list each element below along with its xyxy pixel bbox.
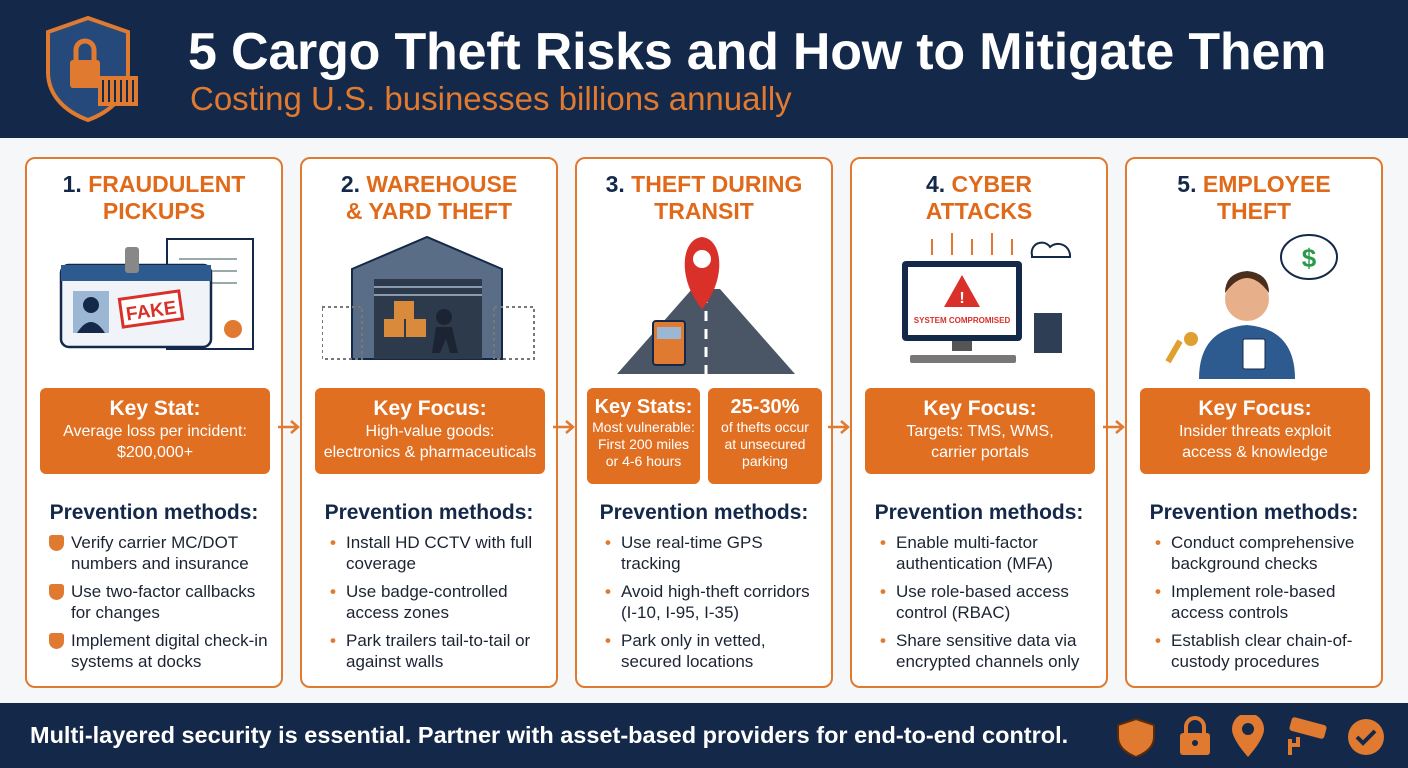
key focus: Insider threats exploit: [1179, 423, 1331, 440]
arrow: [828, 420, 850, 434]
key focus: Key Focus:: [373, 397, 487, 420]
key stats: Key Stats:: [595, 396, 692, 418]
stat 25-30%: of thefts occur: [721, 419, 809, 435]
key stat: Key Stat:: [109, 397, 201, 420]
prevention list: Use badge-controlled access zones: [346, 582, 508, 622]
heading: [926, 171, 1032, 224]
icon: compromised computer: [902, 233, 1072, 363]
prevention heading: Prevention methods:: [325, 501, 533, 524]
key stat: Average loss per incident:: [63, 423, 247, 440]
heading: [63, 171, 246, 224]
key stats: First 200 miles: [598, 436, 689, 452]
prevention list: [1156, 533, 1354, 671]
prevention heading: Prevention methods:: [875, 501, 1083, 524]
key focus: Key Focus:: [1198, 397, 1312, 420]
key focus: Targets: TMS, WMS,: [906, 423, 1054, 440]
prevention list: Verify carrier MC/DOT numbers and insurance: [71, 533, 249, 573]
panel: warehouse & yard theft: [300, 157, 558, 688]
prevention heading: Prevention methods:: [50, 501, 258, 524]
prevention list: Avoid high-theft corridors (I-10, I-95, I-35): [621, 582, 810, 622]
stat 25-30%: at unsecured: [725, 436, 805, 452]
icon: fake ID: [60, 238, 254, 350]
header: [0, 0, 1408, 138]
heading: 3. THEFT DURING: [606, 171, 802, 197]
prevention list: Park only in vetted, secured locations: [621, 631, 766, 671]
icon: compromised computer: SYSTEM COMPROMISED: [914, 316, 1010, 325]
key focus: Key Focus:: [923, 397, 1037, 420]
prevention list: Conduct comprehensive background checks: [1171, 533, 1354, 573]
prevention list: Use two-factor callbacks for changes: [71, 582, 255, 622]
prevention list: Park trailers tail-to-tail or against walls: [346, 631, 530, 671]
prevention list: Use real-time GPS tracking: [621, 533, 763, 573]
key stats: Most vulnerable:: [592, 419, 695, 435]
icon: employee with keys: [1166, 234, 1338, 379]
icon: shield with lock: [46, 16, 138, 122]
prevention list: [606, 533, 810, 671]
footer icons: [1117, 715, 1384, 757]
heading: [1177, 171, 1331, 224]
icon: employee with keys: $: [1302, 243, 1317, 273]
prevention list: Share sensitive data via encrypted channels only: [896, 631, 1079, 671]
stat 25-30%: 25-30%: [731, 396, 799, 418]
icon: compromised computer: !: [959, 290, 965, 307]
prevention list: Implement role-based access controls: [1171, 582, 1335, 622]
heading: TRANSIT: [654, 198, 754, 224]
prevention list: [880, 533, 1080, 671]
prevention list: Use role-based access control (RBAC): [896, 582, 1069, 622]
prevention heading: Prevention methods:: [600, 501, 808, 524]
heading: THEFT: [1217, 198, 1291, 224]
icon: road with pin: [617, 237, 795, 374]
arrow: [553, 420, 575, 434]
panel: fraudulent pickups: [25, 157, 283, 688]
heading: [341, 171, 517, 224]
title: 5 Cargo Theft Risks and How to Mitigate Them: [188, 23, 1326, 81]
arrow: [1103, 420, 1125, 434]
icon: fake ID: FAKE: [125, 298, 178, 325]
subtitle: Costing U.S. businesses billions annually: [190, 80, 792, 117]
heading: 5. EMPLOYEE: [1177, 171, 1331, 197]
key focus: [1140, 388, 1370, 474]
panel: employee theft: [1125, 157, 1383, 688]
footer text: Multi-layered security is essential. Partner with asset-based providers for end-to-end control.: [30, 722, 1068, 748]
heading: PICKUPS: [103, 198, 205, 224]
arrow: [278, 420, 300, 434]
prevention list: Install HD CCTV with full coverage: [346, 533, 532, 573]
heading: 4. CYBER: [926, 171, 1032, 197]
footer: [0, 703, 1408, 768]
prevention list: Establish clear chain-of-custody procedures: [1171, 631, 1352, 671]
panel: theft during transit: [575, 157, 833, 688]
heading: [606, 171, 802, 224]
panel: cyber attacks: [850, 157, 1108, 688]
prevention list: [330, 533, 532, 671]
key focus: access & knowledge: [1182, 444, 1328, 461]
stat 25-30%: parking: [742, 453, 788, 469]
prevention heading: Prevention methods:: [1150, 501, 1358, 524]
key stat: [40, 388, 270, 474]
key focus: [865, 388, 1095, 474]
key stat: $200,000+: [117, 444, 193, 461]
key stats: [587, 388, 700, 484]
key stats: or 4-6 hours: [606, 453, 681, 469]
key focus: carrier portals: [931, 444, 1029, 461]
heading: 1. FRAUDULENT: [63, 171, 245, 197]
prevention list: Implement digital check-in systems at docks: [71, 631, 268, 671]
prevention list: [49, 533, 268, 671]
key focus: [315, 388, 545, 474]
heading: & YARD THEFT: [346, 198, 512, 224]
stat 25-30%: [708, 388, 822, 484]
key focus: electronics & pharmaceuticals: [324, 444, 536, 461]
heading: ATTACKS: [926, 198, 1032, 224]
heading: 2. WAREHOUSE: [341, 171, 517, 197]
key focus: High-value goods:: [366, 423, 494, 440]
prevention list: Enable multi-factor authentication (MFA): [896, 533, 1053, 573]
icon: warehouse: [322, 236, 535, 360]
